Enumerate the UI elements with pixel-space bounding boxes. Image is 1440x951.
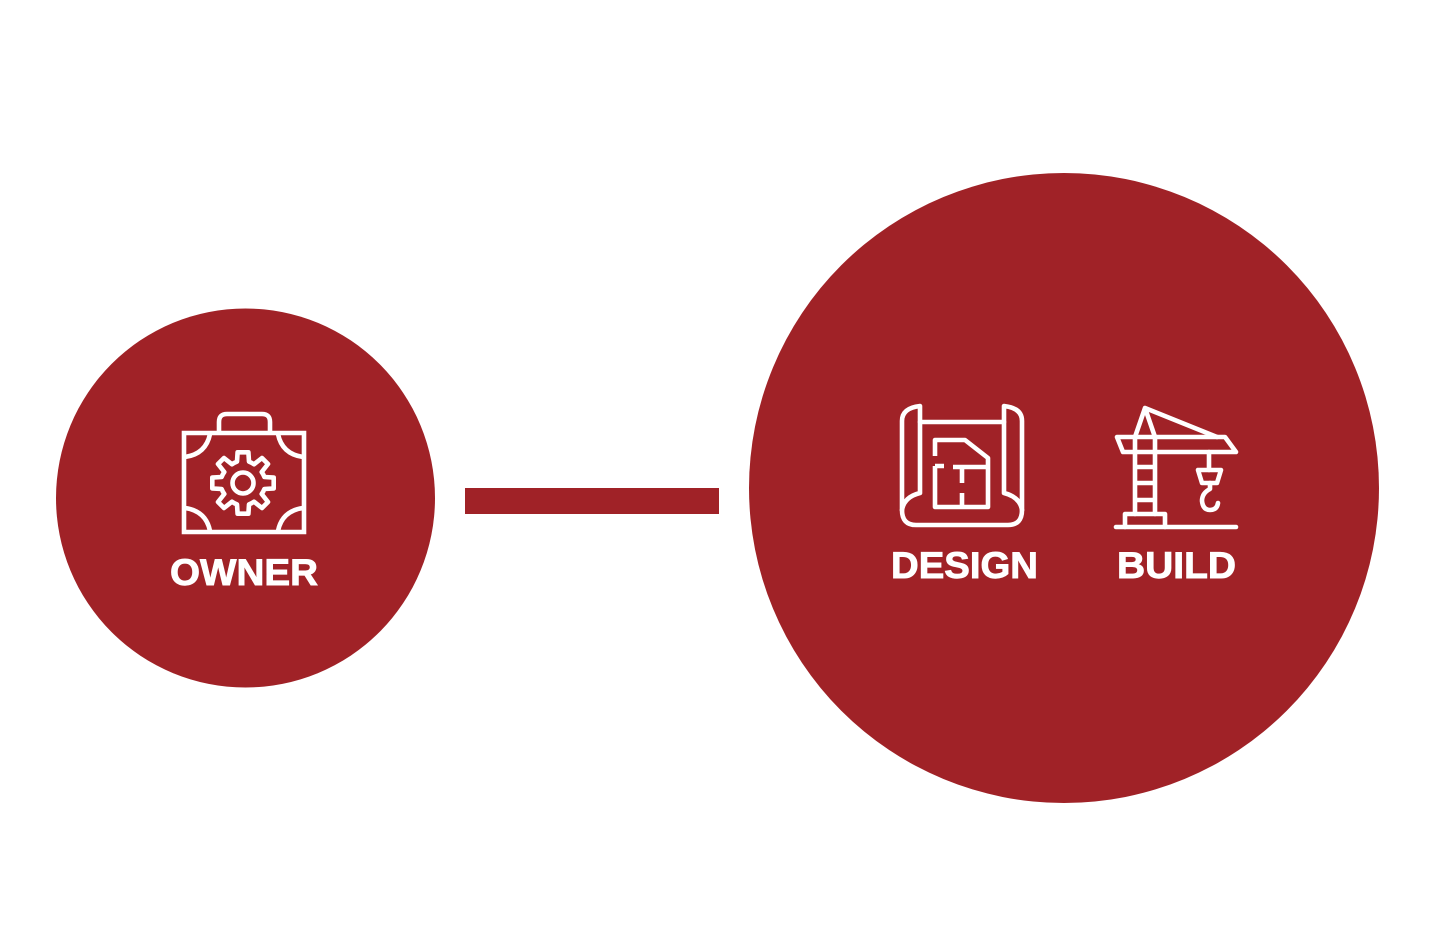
icon: blueprint <box>902 406 1022 525</box>
label: design: DESIGN <box>891 545 1038 586</box>
label: owner: OWNER <box>170 552 318 593</box>
connector bar <box>465 488 719 514</box>
label: build: BUILD <box>1117 545 1236 586</box>
panel: design-build circle <box>749 173 1379 803</box>
panel: owner circle <box>56 308 435 688</box>
icon: tower crane <box>1116 408 1236 527</box>
icon: briefcase with gear <box>184 414 304 532</box>
